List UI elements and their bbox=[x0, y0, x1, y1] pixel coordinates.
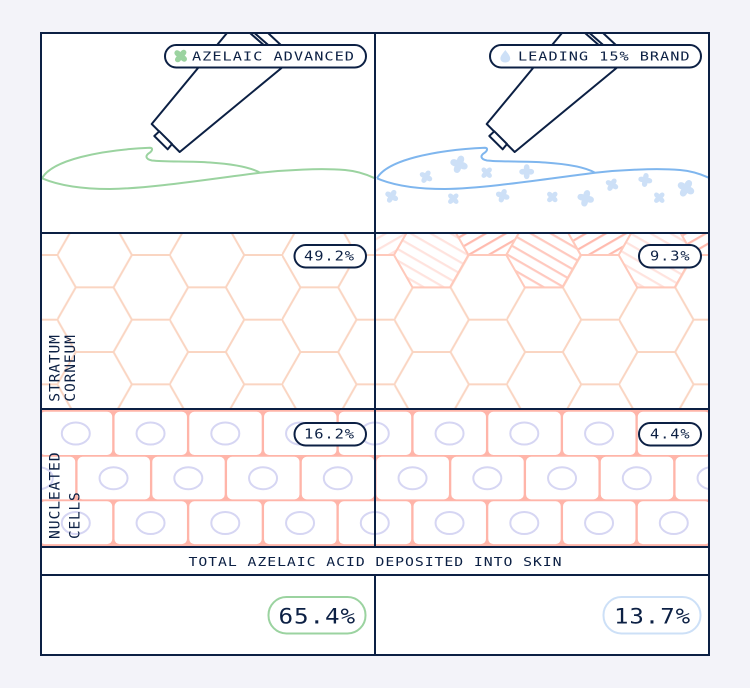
label: nucleated cells: NUCLEATED bbox=[47, 452, 63, 539]
hatched hexagons: azelaic acid in stratum corneum, leading brand bbox=[376, 234, 708, 288]
panel: application, azelaic advanced bbox=[42, 33, 375, 189]
label: nucleated cells bbox=[47, 452, 83, 539]
value pill: stratum corneum leading brand bbox=[639, 245, 701, 268]
label: stratum corneum: CORNEUM bbox=[63, 334, 79, 402]
value pill: stratum corneum azelaic advanced: 49.2% bbox=[304, 248, 355, 264]
panel: nucleated cells bbox=[42, 410, 708, 546]
panel: application, leading 15% brand bbox=[377, 33, 710, 209]
heading: total deposited: TOTAL AZELAIC ACID DEPOSITED INTO SKIN bbox=[188, 555, 562, 570]
value pill: nucleated cells leading brand: 4.4% bbox=[650, 426, 690, 442]
green cream layer bbox=[42, 148, 375, 189]
undissolved crystals bbox=[385, 156, 694, 206]
icon: blue drop bbox=[500, 50, 510, 62]
total pill: azelaic advanced bbox=[268, 597, 366, 634]
legend pill: azelaic advanced bbox=[165, 45, 366, 68]
total pill: azelaic advanced: 65.4% bbox=[278, 605, 356, 630]
icon: tube applying leading brand bbox=[487, 33, 625, 152]
icon: green crystal bbox=[170, 46, 191, 66]
value pill: stratum corneum azelaic advanced bbox=[294, 245, 366, 268]
total pill: leading brand bbox=[604, 597, 700, 634]
total pill: leading brand: 13.7% bbox=[614, 605, 691, 630]
label: stratum corneum: STRATUM bbox=[47, 334, 63, 402]
value pill: nucleated cells azelaic advanced: 16.2% bbox=[304, 426, 355, 442]
value pill: nucleated cells azelaic advanced bbox=[294, 423, 366, 446]
legend pill: leading 15% brand: LEADING 15% BRAND bbox=[518, 50, 690, 64]
value pill: nucleated cells leading brand bbox=[639, 423, 701, 446]
blue cream layer bbox=[377, 148, 710, 189]
legend pill: leading 15% brand bbox=[490, 45, 701, 68]
value pill: stratum corneum leading brand: 9.3% bbox=[650, 248, 690, 264]
label: stratum corneum bbox=[47, 334, 79, 402]
icon: tube applying azelaic advanced bbox=[152, 33, 290, 152]
panel: stratum corneum hexagons bbox=[42, 234, 708, 408]
label: nucleated cells: CELLS bbox=[67, 492, 83, 539]
legend pill: azelaic advanced: AZELAIC ADVANCED bbox=[192, 50, 355, 64]
